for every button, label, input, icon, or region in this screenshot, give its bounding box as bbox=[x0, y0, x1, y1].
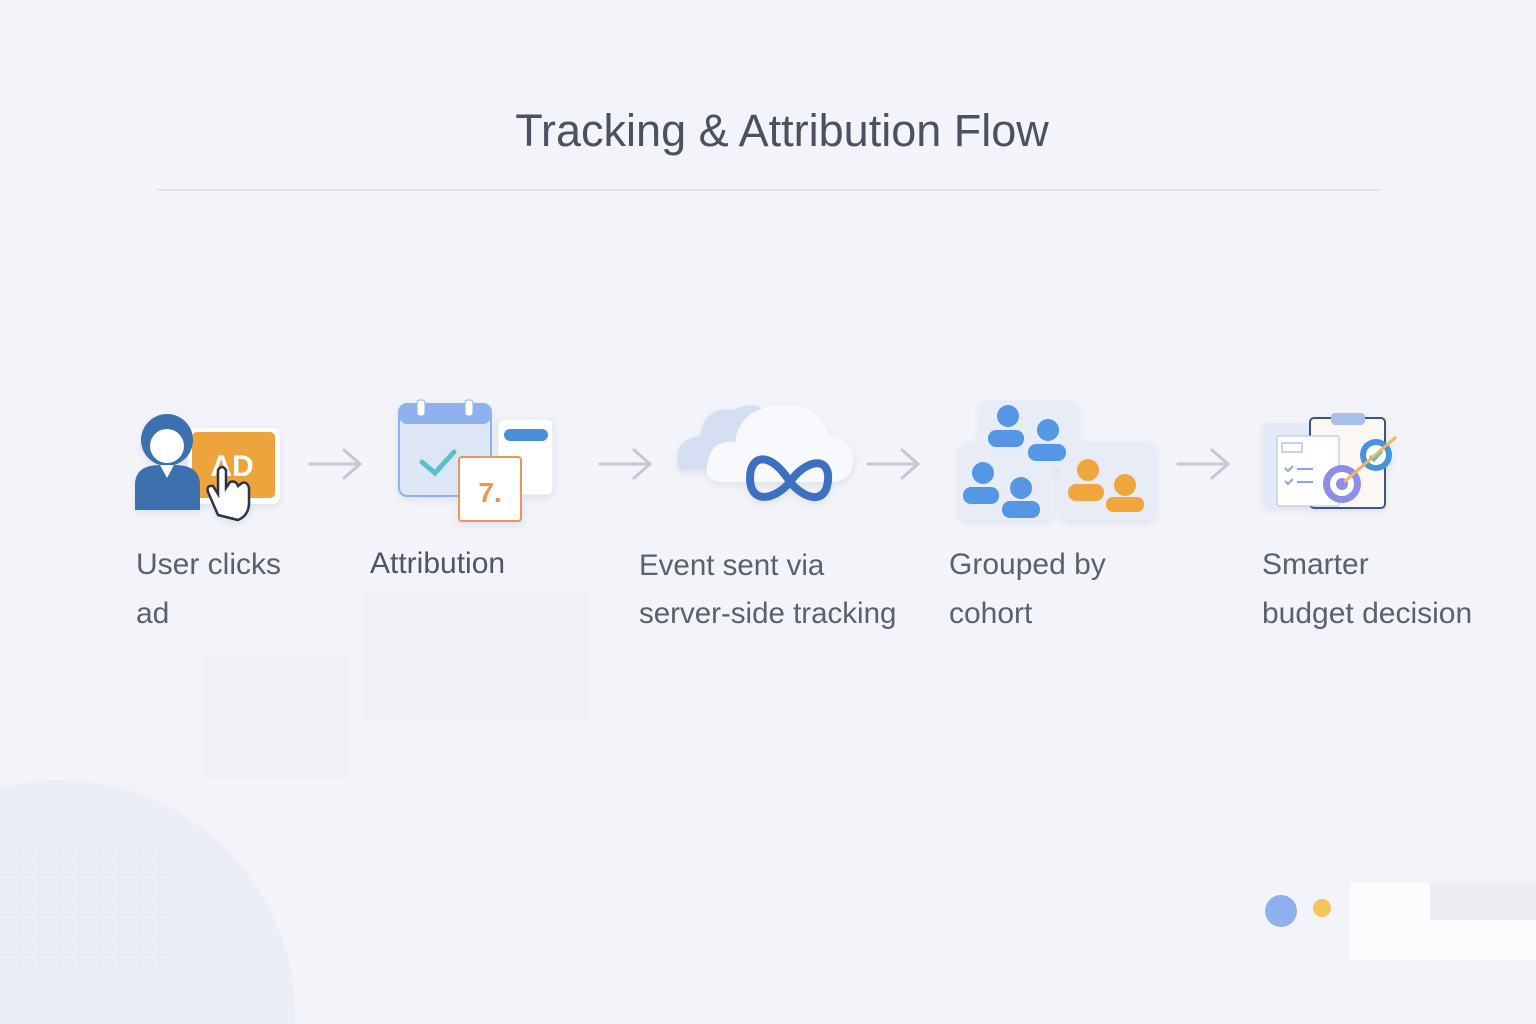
icon: budget decision clipboard with target bbox=[1263, 413, 1396, 508]
label: user clicks ad: User clicks bbox=[136, 548, 281, 581]
label: event sent bbox=[639, 549, 896, 630]
label: grouped by cohort: Grouped by bbox=[949, 548, 1106, 581]
icon: attribution calendar bbox=[399, 400, 553, 521]
decorative dots and card bbox=[1265, 883, 1536, 960]
label: smarter budget decision bbox=[1262, 548, 1472, 630]
label: attribution: Attribution bbox=[370, 547, 505, 580]
label: grouped by cohort: cohort bbox=[949, 597, 1033, 630]
decorative faint panels bbox=[205, 590, 587, 780]
title: Tracking & Attribution Flow bbox=[515, 105, 1049, 156]
label: grouped by cohort bbox=[949, 548, 1106, 630]
label: user clicks ad bbox=[136, 548, 281, 630]
decorative background circle bbox=[0, 780, 295, 1024]
icon: user clicks ad: AD bbox=[210, 450, 254, 483]
icon: user clicks ad bbox=[135, 414, 280, 520]
icon: cohort groups bbox=[958, 400, 1156, 520]
icon: cloud with meta logo bbox=[678, 405, 853, 497]
arrow 2 bbox=[600, 450, 650, 478]
label: user clicks ad: ad bbox=[136, 597, 169, 630]
icon: attribution calendar: 7. bbox=[478, 477, 502, 508]
arrow 4 bbox=[1178, 450, 1228, 478]
label: smarter budget decision: Smarter bbox=[1262, 548, 1369, 581]
arrow 1 bbox=[310, 450, 360, 478]
label: event sent: server-side tracking bbox=[639, 597, 896, 630]
arrow 3 bbox=[868, 450, 918, 478]
label: smarter budget decision: budget decision bbox=[1262, 597, 1472, 630]
label: event sent: Event sent via bbox=[639, 549, 825, 582]
